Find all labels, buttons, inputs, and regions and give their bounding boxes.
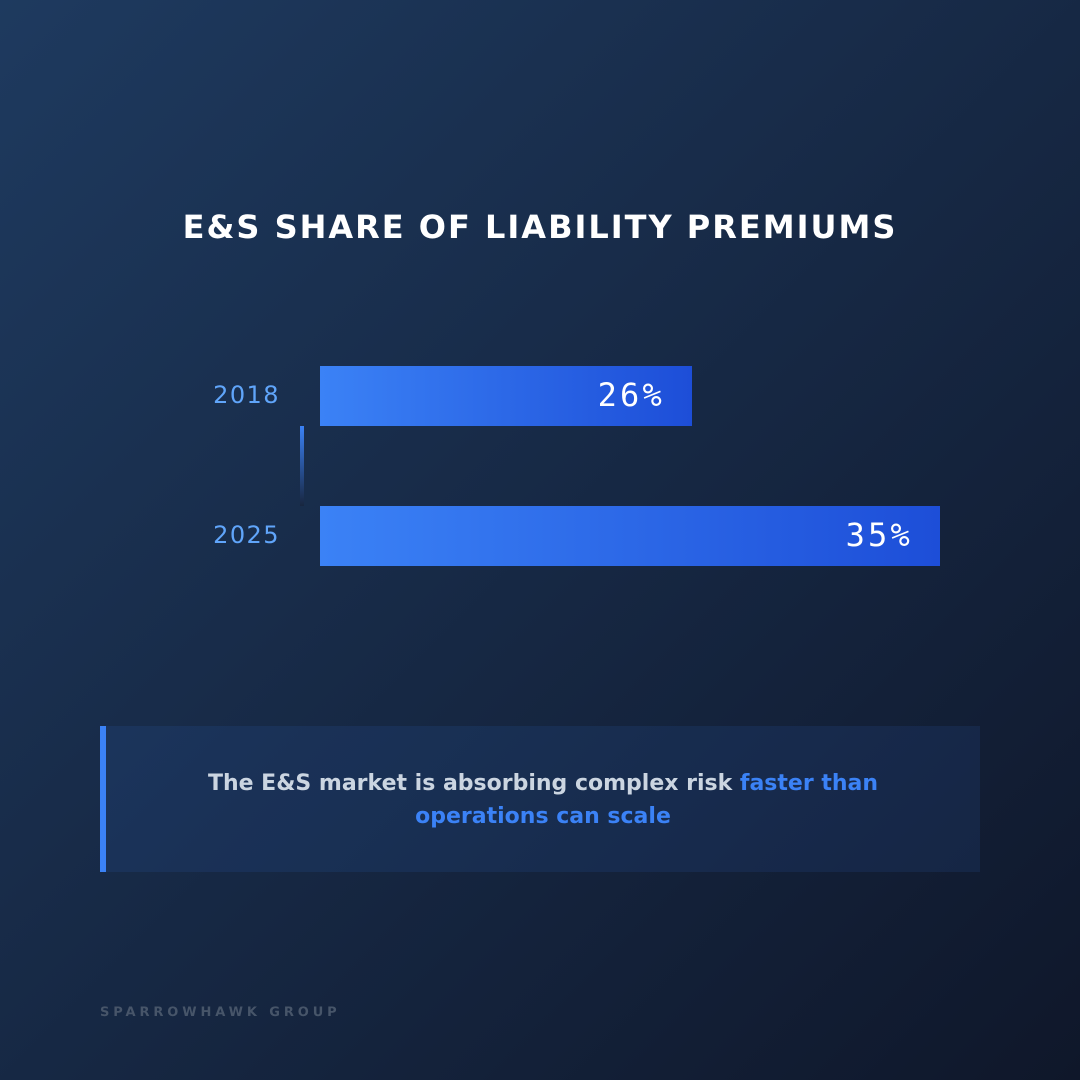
- callout text: operations can scale: [415, 804, 671, 829]
- callout panel: [100, 726, 980, 872]
- value: 26%: 26%: [598, 376, 665, 414]
- year label: 2025: 2025: [213, 521, 280, 549]
- bar: 2018 at 26%: [320, 366, 692, 426]
- value: 35%: 35%: [846, 516, 913, 554]
- year label: 2018: 2018: [213, 381, 280, 409]
- callout text: [208, 771, 878, 829]
- callout text: The E&S market is absorbing complex risk faster than: [208, 771, 878, 796]
- bar: 2025 at 35%: [320, 506, 940, 566]
- title: E&S SHARE OF LIABILITY PREMIUMS: [183, 208, 897, 246]
- footer brand: SPARROWHAWK GROUP: [100, 1005, 341, 1020]
- callout accent edge: [100, 726, 106, 872]
- connector between years: [300, 426, 304, 506]
